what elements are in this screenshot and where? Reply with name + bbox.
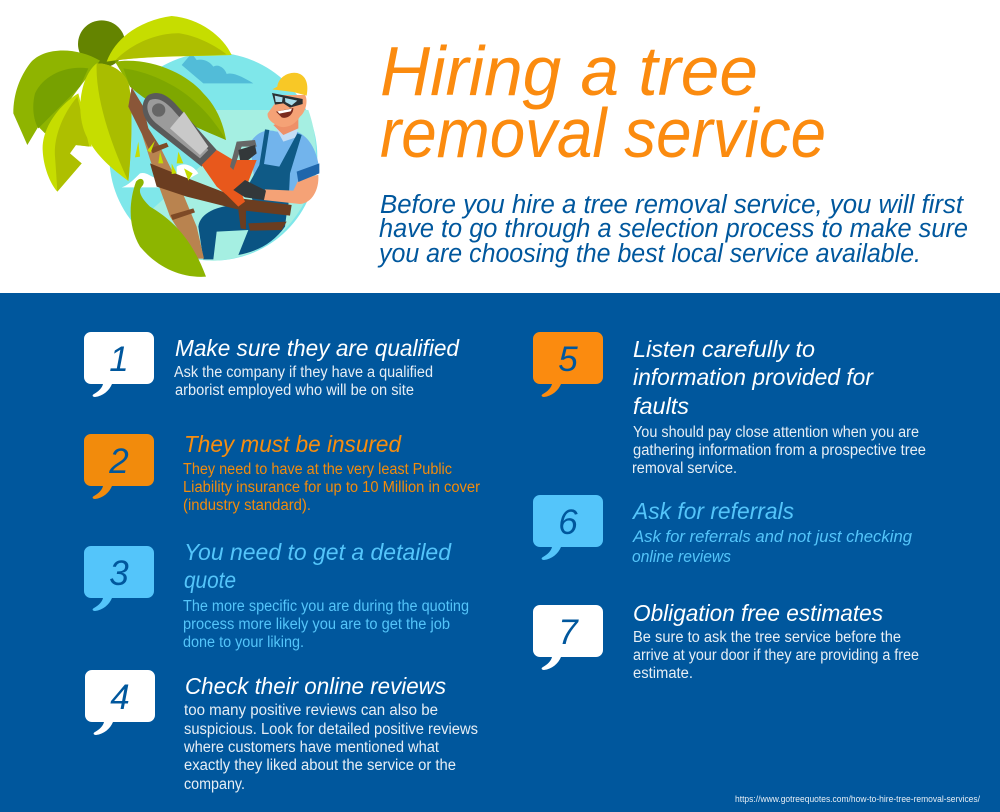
tip 1 [84, 332, 460, 399]
heading 5 [633, 336, 874, 419]
heading 3 [184, 539, 452, 593]
body 3: process more likely you are to get the job [183, 616, 450, 633]
body 1: arborist employed who will be on site [175, 382, 414, 399]
icon: speech bubble 4: 4 [110, 678, 130, 717]
body 5: You should pay close attention when you are [633, 424, 919, 441]
heading 5: faults [633, 393, 689, 419]
arm [263, 175, 318, 204]
icon: speech bubble 7 [533, 605, 603, 670]
body 6 [632, 527, 913, 566]
tip 5 [533, 332, 926, 477]
heading 3: You need to get a detailed [184, 539, 452, 565]
panel: tips background [0, 293, 1000, 812]
body 2: (industry standard). [183, 497, 311, 514]
chainsaw [143, 93, 266, 207]
illustration: tree surgeon cutting palm tree [13, 16, 319, 277]
icon: speech bubble 4 [85, 670, 155, 735]
centre leaf [80, 63, 131, 181]
body 4: company. [184, 776, 245, 793]
body 1 [174, 364, 433, 399]
icon: speech bubble 2 [84, 434, 154, 499]
body 3: The more specific you are during the quoting [183, 598, 469, 615]
icon: speech bubble 3: 3 [109, 554, 129, 593]
body 3 [183, 598, 469, 651]
tip 2 [84, 431, 480, 514]
icon: speech bubble 1: 1 [109, 340, 129, 379]
intro text: have to go through a selection process to make sure [379, 215, 968, 243]
body 7: estimate. [633, 665, 693, 682]
top leaf [107, 16, 232, 62]
legs [198, 205, 287, 259]
harness belt [150, 163, 292, 216]
tip 4 [85, 670, 478, 793]
body 4: suspicious. Look for detailed positive reviews [184, 721, 478, 738]
body 5: removal service. [632, 460, 737, 477]
icon: speech bubble 7: 7 [558, 613, 579, 652]
body 5 [632, 424, 926, 477]
tip 7 [533, 600, 919, 682]
body 2: They need to have at the very least Public [183, 461, 452, 478]
heading 5: Listen carefully to [633, 336, 815, 362]
icon: speech bubble 6: 6 [558, 503, 578, 542]
body 7: Be sure to ask the tree service before the [633, 629, 901, 646]
body 4: where customers have mentioned what [183, 739, 440, 756]
overalls [248, 129, 302, 207]
heading 7: Obligation free estimates [633, 600, 883, 626]
body 1: Ask the company if they have a qualified [174, 364, 433, 381]
body 4: too many positive reviews can also be [184, 702, 438, 719]
palm leaves [13, 16, 232, 192]
bottom leaf [131, 179, 206, 277]
title: removal service [380, 94, 826, 172]
icon: speech bubble 2: 2 [108, 442, 129, 481]
heading 5: information provided for [633, 364, 874, 390]
body 6: online reviews [632, 547, 731, 566]
icon: speech bubble 1 [84, 332, 154, 397]
heading 4: Check their online reviews [185, 673, 446, 699]
icon: speech bubble 5 [533, 332, 603, 397]
sky circle [109, 53, 317, 261]
intro text: you are choosing the best local service available. [377, 240, 921, 268]
left leaf [13, 50, 100, 145]
tip 6 [533, 495, 913, 566]
wood chips [135, 141, 193, 181]
body 4: exactly they liked about the service or the [184, 757, 456, 774]
body 7 [633, 629, 919, 682]
source url: https://www.gotreequotes.com/how-to-hire-tree-removal-services/ [735, 794, 980, 804]
icon: speech bubble 6 [533, 495, 603, 560]
coconut [78, 20, 125, 68]
body 2: Liability insurance for up to 10 Million in cover [183, 479, 480, 496]
trunk [128, 87, 204, 259]
goggles [272, 93, 303, 108]
heading 1: Make sure they are qualified [175, 335, 460, 361]
heading 2: They must be insured [184, 431, 402, 457]
worker [198, 73, 319, 259]
body 2 [183, 461, 480, 514]
intro text: Before you hire a tree removal service, you will first [380, 191, 964, 219]
heading 3: quote [184, 567, 236, 593]
cloud [182, 53, 253, 83]
icon: speech bubble 5: 5 [558, 340, 578, 379]
body 5: gathering information from a prospective tree [633, 442, 926, 459]
intro text [377, 191, 968, 268]
body 3: done to your liking. [183, 634, 304, 651]
right leaf [115, 61, 226, 140]
lower left leaf [43, 93, 92, 192]
tip 3 [84, 539, 469, 651]
title: Hiring a tree [380, 32, 758, 110]
body 7: arrive at your door if they are providing a free [633, 647, 919, 664]
shirt [250, 130, 319, 200]
body 4 [183, 702, 478, 793]
neck and head [273, 115, 298, 135]
hard hat [272, 73, 307, 96]
body 6: Ask for referrals and not just checking [632, 527, 913, 546]
title [380, 32, 826, 172]
heading 6: Ask for referrals [631, 498, 794, 524]
icon: speech bubble 3 [84, 546, 154, 611]
